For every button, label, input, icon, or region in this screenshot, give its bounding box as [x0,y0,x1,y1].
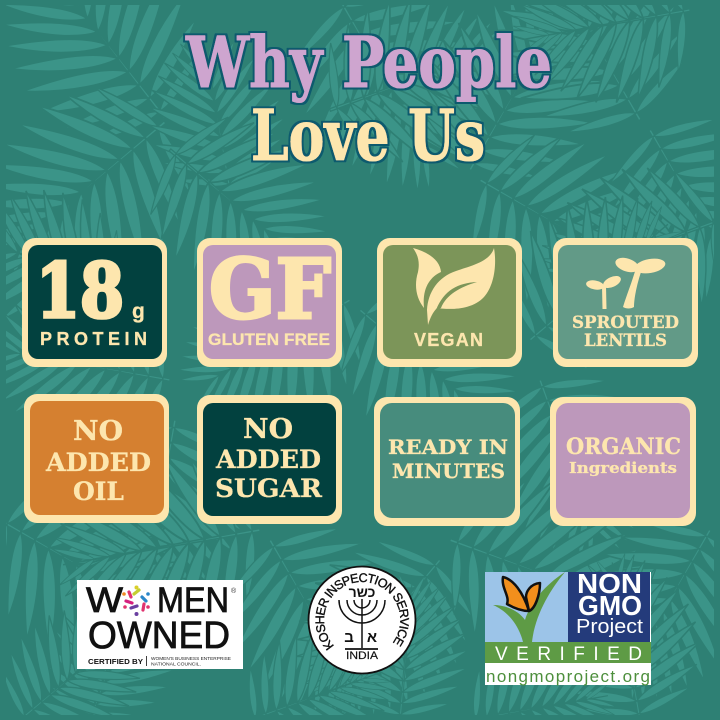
logo: kosher inspection service [308,566,416,674]
icon: butterfly [503,577,540,611]
logo: women owned [77,580,243,669]
label ingredients: Ingredients [569,459,677,477]
wbenc name [151,656,231,668]
label oil: OIL [73,477,124,506]
label no: NO [73,416,123,447]
registered mark: ® [231,587,237,595]
card: gluten free [197,238,342,367]
logo: non gmo project verified [485,568,651,686]
card: organic ingredients [550,397,696,526]
GF letters: GF [209,242,331,338]
label sugar: SUGAR [215,474,322,503]
non gmo wordmark: NON [577,568,642,599]
women wordmark: W [86,581,123,620]
ring text: KOSHER INSPECTION SERVICE [315,573,410,651]
certified by: CERTIFIED BY [88,657,143,666]
protein label: PROTEIN [40,329,147,349]
icon: colourful figures ring [122,586,150,616]
label organic: ORGANIC [566,434,681,460]
women wordmark: MEN [157,581,229,620]
card: ready in minutes [374,397,520,526]
title [185,21,552,177]
website: nongmoproject.org [486,667,650,686]
verified bar: VERIFIED [495,644,642,665]
label added: ADDED [45,448,151,477]
india label: INDIA [346,650,379,662]
card: sprouted lentils [553,238,698,367]
label no: NO [243,414,293,445]
g unit: g [132,300,145,323]
non gmo wordmark [576,568,643,638]
title line 1: Why People [185,21,552,104]
hebrew letters: ב [344,629,354,646]
label ready in: READY IN [388,435,508,459]
label minutes: MINUTES [392,459,505,483]
card: vegan [377,238,522,367]
card: no added sugar [197,395,342,524]
sprouted label: SPROUTED [572,313,679,333]
hebrew letters: א [367,629,377,646]
title line 2: Love Us [251,94,485,177]
icon: sprouts [585,255,666,309]
hebrew word: כשר [349,584,375,600]
non gmo wordmark: GMO [578,590,642,621]
vegan label: VEGAN [414,330,483,350]
gluten free label: GLUTEN FREE [208,330,330,349]
icon: menorah [339,599,385,649]
card: 18g protein [22,238,167,367]
wbenc name: NATIONAL COUNCIL. [151,662,201,668]
women wordmark [86,581,229,620]
icon: grass check [493,572,565,642]
label added: ADDED [215,445,321,474]
hebrew letters [344,629,377,646]
icon: vegan leaves [413,248,495,325]
wbenc name: WOMEN'S BUSINESS ENTERPRISE [151,656,231,662]
owned wordmark: OWNED [88,615,230,657]
18 numeral: 18 [36,247,124,335]
lentils label: LENTILS [584,331,667,351]
card: no added oil [24,394,169,523]
non gmo wordmark: Project [576,616,643,638]
